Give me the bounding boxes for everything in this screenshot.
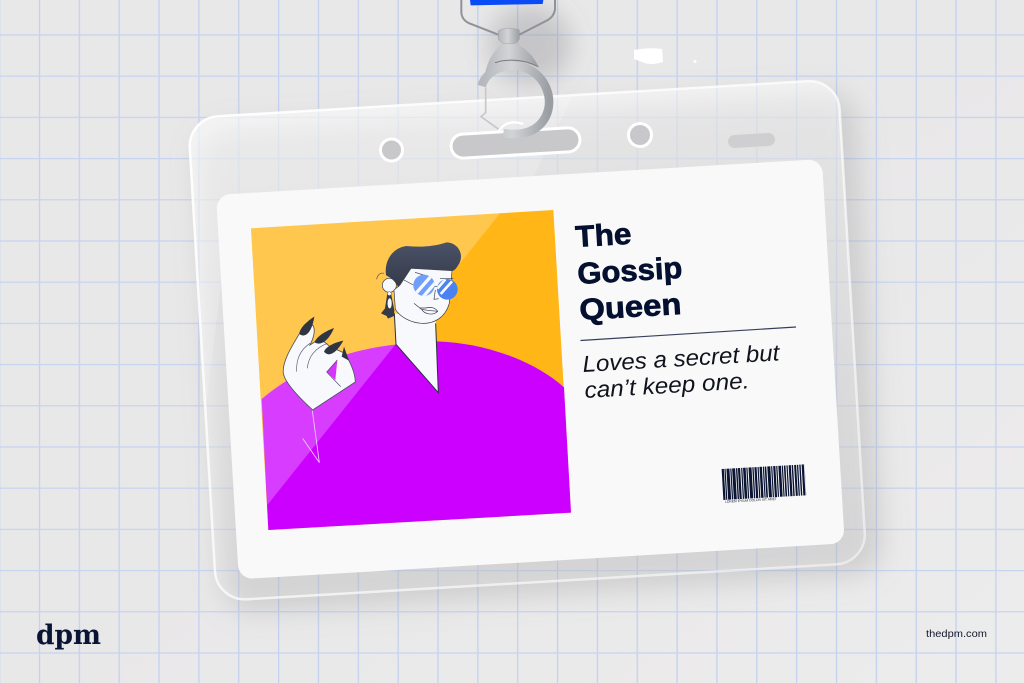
nose and mouth	[414, 290, 439, 314]
logo: dpm: dpm	[36, 620, 101, 651]
hand	[283, 317, 355, 410]
lanyard strap and wire	[461, 0, 555, 35]
swivel	[498, 28, 519, 43]
title: The Gossip Queen	[574, 218, 683, 327]
title: The Gossip Queen: Gossip	[576, 252, 683, 291]
hair strand	[381, 293, 394, 319]
blue lanyard strap	[470, 0, 543, 5]
ring	[482, 66, 549, 134]
sunglasses	[404, 272, 458, 300]
plastic badge holder	[170, 60, 867, 620]
white paper marks	[634, 48, 696, 64]
plastic sheen	[170, 60, 590, 620]
slot rim over ring	[498, 122, 523, 132]
slot hole	[450, 127, 581, 159]
tagline	[582, 339, 782, 403]
gate	[481, 87, 501, 131]
site url: thedpm.com	[926, 628, 987, 640]
pinch gap	[327, 360, 337, 380]
punch hole right	[628, 124, 652, 146]
divider line	[580, 327, 796, 340]
neck	[394, 313, 438, 393]
purple jumper	[262, 341, 571, 530]
title: The Gossip Queen: The	[574, 218, 632, 254]
tagline: can’t keep one.	[584, 367, 750, 403]
hair	[386, 242, 461, 287]
clip shadow	[488, 5, 572, 85]
barcode	[722, 480, 806, 504]
card sheen	[251, 213, 500, 505]
title: The Gossip Queen: Queen	[578, 288, 682, 327]
yellow background	[251, 210, 571, 530]
punch hole left	[380, 139, 402, 161]
illustration panel	[251, 210, 571, 530]
face	[394, 268, 452, 323]
wire loop	[461, 0, 555, 35]
grey slot right	[728, 133, 775, 148]
sleeve lines	[303, 411, 319, 463]
ear	[382, 278, 396, 292]
lanyard hook	[481, 28, 549, 134]
badge shadow	[196, 91, 884, 613]
white ID card	[216, 159, 845, 579]
tagline: Loves a secret but	[582, 339, 782, 377]
barcode caption: LOREM IPSUM DOLOR SIT AMET	[725, 497, 777, 504]
hook body	[485, 43, 538, 74]
nails	[299, 317, 314, 335]
earring	[387, 292, 392, 309]
